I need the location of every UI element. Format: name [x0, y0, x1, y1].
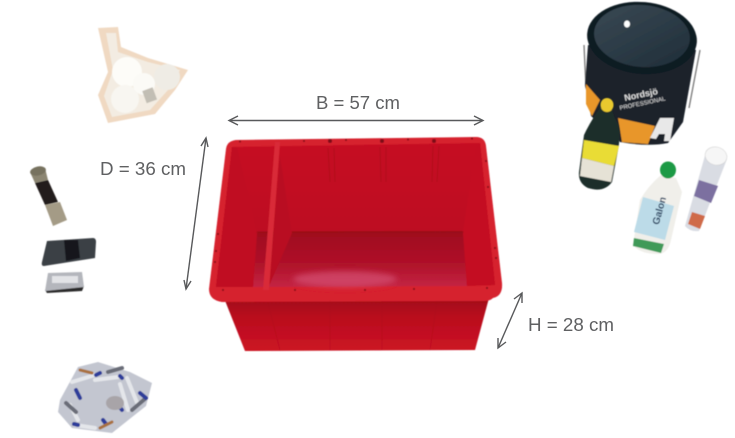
blue battery ends: [74, 373, 146, 425]
flashlight head: [29, 165, 47, 177]
wall ribs: [328, 146, 439, 182]
divider: [263, 142, 280, 290]
bag of batteries: [58, 362, 152, 433]
bulb 1: [112, 57, 142, 87]
plastic bag: [58, 362, 152, 433]
bottle body: [633, 175, 682, 254]
box interior back wall: [216, 143, 495, 287]
bag of light bulbs: [98, 27, 188, 123]
flashlight body: [35, 180, 58, 205]
orange label bottom: [618, 118, 655, 144]
can label: [694, 180, 718, 203]
bucket body: [585, 45, 696, 145]
phone shadow: [45, 286, 84, 293]
white letter A: [650, 118, 674, 141]
floor highlight: [293, 271, 397, 287]
copper batteries: [80, 370, 112, 428]
dimension arrow: depth: [184, 138, 208, 289]
box rim: [209, 137, 502, 302]
dimension arrow: height: [498, 293, 522, 348]
dimension arrow: width: [229, 116, 483, 125]
red storage box: [209, 137, 502, 351]
inner plastic: [104, 33, 180, 117]
shadow of back wall base: [257, 232, 463, 233]
box front body: [224, 298, 489, 351]
lid inner: [591, 1, 693, 71]
product name: Galon: [651, 196, 669, 226]
right inner wall: [463, 143, 495, 286]
plastic bag: [98, 27, 188, 123]
green cap: [660, 162, 676, 178]
smartphone: [42, 238, 96, 266]
green base band: [633, 238, 664, 253]
flashlight tail: [45, 202, 67, 226]
white label: [580, 158, 614, 182]
bottle body: [579, 108, 620, 190]
can accent: [688, 212, 705, 229]
silver batteries: [70, 375, 138, 428]
phone body: [42, 238, 96, 266]
phone highlight: [52, 276, 78, 283]
bulb 2: [154, 64, 180, 90]
phone screen glare: [64, 240, 80, 261]
label: width: B = 57 cm: [316, 93, 400, 113]
brand text: Nordsjö: [623, 86, 659, 103]
phone body: [45, 272, 84, 291]
left inner wall: [216, 147, 257, 287]
orange label left: [586, 84, 600, 116]
label: depth: D = 36 cm: [100, 159, 186, 179]
bulb 4: [133, 73, 155, 95]
divider panel: [269, 156, 292, 286]
can body: [685, 152, 727, 231]
rim holes: [214, 138, 497, 291]
flashlight neck: [30, 168, 48, 183]
paint bucket: [584, 0, 700, 145]
dark battery bodies: [66, 368, 146, 412]
lid glare: [624, 20, 630, 28]
white bottle green cap: [633, 162, 682, 254]
dark bottle yellow cap: [579, 98, 620, 190]
bag glare: [106, 396, 124, 410]
lid rim: [584, 0, 700, 79]
can top: [703, 144, 729, 168]
bulb 3: [111, 85, 139, 113]
front ribs: [268, 301, 437, 350]
bucket handle: [584, 45, 700, 108]
yellow band: [582, 140, 619, 166]
box interior floor: [253, 232, 467, 287]
batteries: [66, 368, 146, 428]
yellow cap: [600, 98, 614, 112]
spray can: [685, 144, 729, 231]
label: height: H = 28 cm: [528, 315, 614, 335]
flashlight: [29, 165, 67, 226]
old mobile phone: [45, 272, 84, 293]
blue label: [634, 197, 674, 240]
bulb screw base: [142, 87, 157, 103]
brand sub text: PROFESSIONAL: [619, 96, 667, 112]
